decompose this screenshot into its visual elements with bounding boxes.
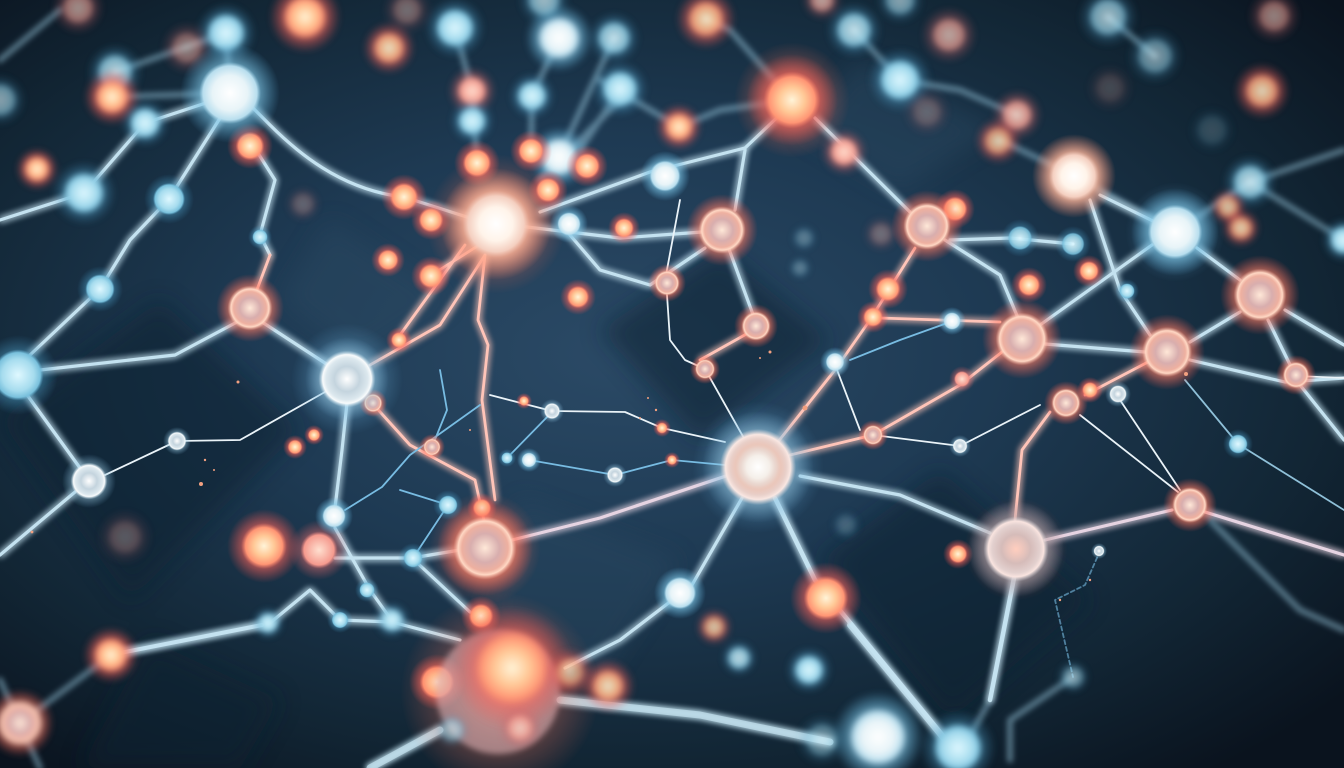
thin blue connections (345, 322, 1100, 677)
glass hub nodes with orange rims (216, 134, 1316, 597)
pink energised connections (255, 235, 1148, 525)
thin white connections (105, 200, 1344, 510)
sparkle particles (31, 350, 1188, 601)
foreground large orange node (400, 592, 600, 768)
orange glowing nodes (227, 54, 1105, 710)
halos behind hub nodes (291, 42, 1225, 604)
white and blue hub nodes (0, 43, 1253, 633)
